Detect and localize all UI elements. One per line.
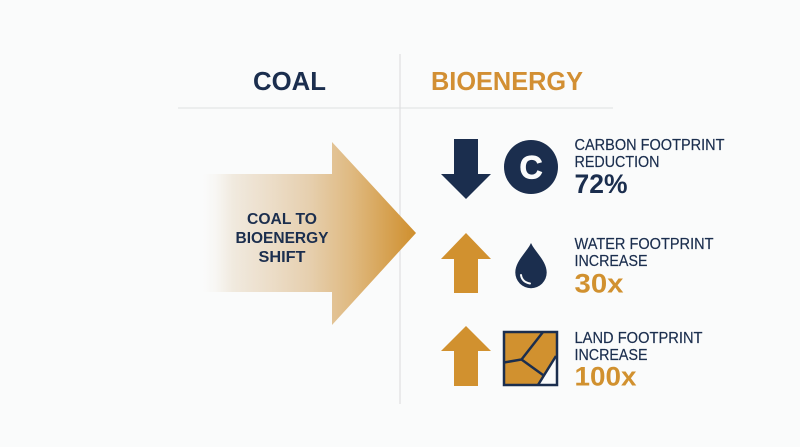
heading: bioenergy: BIOENERGY bbox=[431, 66, 583, 96]
heading: coal: COAL bbox=[253, 66, 326, 96]
water value: 30x bbox=[574, 268, 624, 298]
row: carbon footprint bbox=[441, 137, 725, 199]
water text: INCREASE bbox=[574, 253, 648, 270]
icon: water drop bbox=[515, 243, 547, 288]
icon: up arrow bbox=[441, 233, 491, 293]
arrow label: SHIFT bbox=[258, 249, 306, 266]
carbon text: REDUCTION bbox=[574, 154, 660, 171]
icon: up arrow bbox=[441, 326, 491, 386]
icon: carbon circle bbox=[504, 140, 558, 194]
land value: 100x bbox=[574, 362, 636, 392]
icon: carbon circle: C bbox=[519, 150, 543, 186]
carbon value: 72% bbox=[574, 169, 628, 199]
carbon text: CARBON FOOTPRINT bbox=[574, 137, 725, 154]
water text: WATER FOOTPRINT bbox=[574, 236, 714, 253]
row: land footprint bbox=[441, 326, 703, 392]
land text: INCREASE bbox=[574, 347, 648, 364]
icon: down arrow bbox=[441, 139, 491, 199]
land text: LAND FOOTPRINT bbox=[574, 330, 703, 347]
large shift arrow bbox=[203, 142, 416, 325]
icon: land parcels bbox=[504, 332, 557, 385]
row: water footprint bbox=[441, 233, 714, 298]
arrow label: COAL TO bbox=[247, 211, 317, 228]
arrow label: BIOENERGY bbox=[236, 230, 329, 247]
